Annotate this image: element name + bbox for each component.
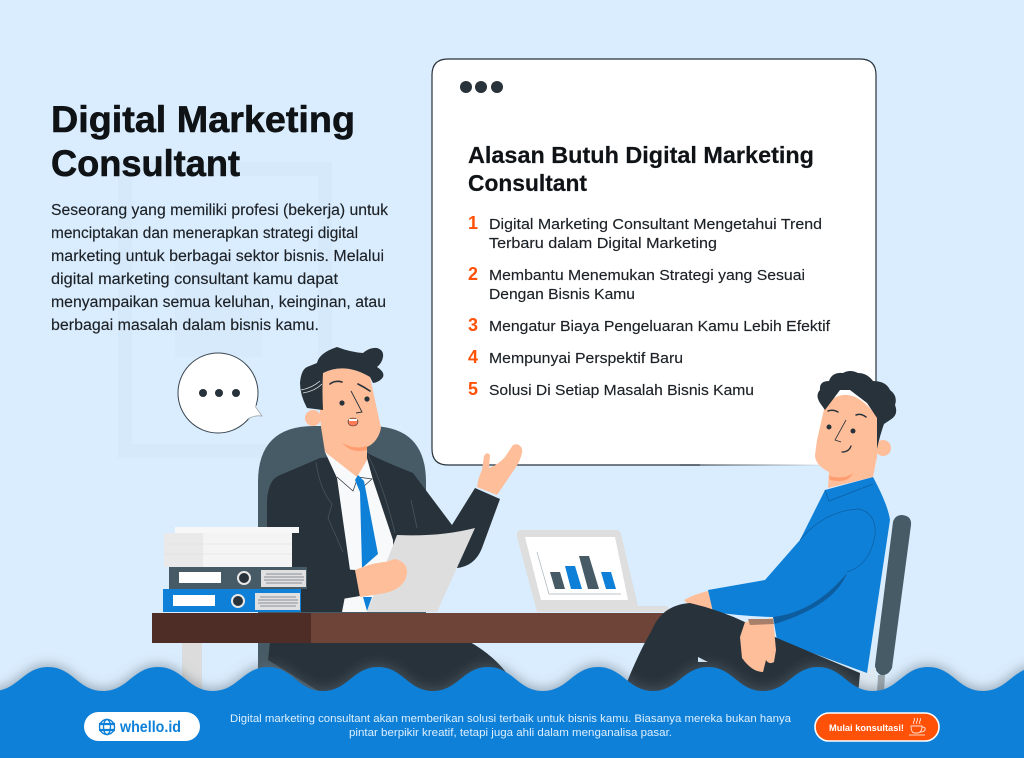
numbered list: Digital Marketing Consultant Mengetahui Trend <box>489 216 822 233</box>
necktie <box>355 475 378 611</box>
illustration: client seated <box>627 371 911 695</box>
lapels <box>316 455 417 552</box>
icon: coffee cup <box>909 718 925 735</box>
stack of files <box>163 527 307 612</box>
icon: speech bubble <box>178 353 262 433</box>
title: Consultant <box>51 143 240 184</box>
sheet of paper <box>367 528 475 612</box>
intro paragraph: menyampaikan semua keluhan, keinginan, atau <box>51 294 386 311</box>
intro paragraph: menciptakan dan menerapkan strategi digital <box>51 225 358 242</box>
icon: globe <box>99 720 115 734</box>
footer text <box>230 713 792 739</box>
intro paragraph: marketing untuk berbagai sektor bisnis. Melalui <box>51 248 384 265</box>
intro paragraph: berbagai masalah dalam bisnis kamu. <box>51 317 319 334</box>
far hand <box>684 591 714 610</box>
footer text: Digital marketing consultant akan memberikan solusi terbaik untuk bisnis kamu. Biasanya mereka bukan hanya <box>230 713 792 725</box>
sweater <box>708 477 890 673</box>
forearm holding paper <box>300 567 360 606</box>
window dots <box>460 81 503 93</box>
intro paragraph: digital marketing consultant kamu dapat <box>51 271 339 288</box>
panel: reasons window <box>432 59 876 466</box>
intro paragraph: Seseorang yang memiliki profesi (bekerja) untuk <box>51 202 388 219</box>
numbered list: Solusi Di Setiap Masalah Bisnis Kamu <box>489 382 754 399</box>
numbered list <box>468 213 831 399</box>
logo pill: whello.id <box>119 719 181 736</box>
collar lines <box>337 477 372 491</box>
face features <box>826 410 866 452</box>
neck and head <box>815 395 877 488</box>
panel heading: Alasan Butuh Digital Marketing <box>468 142 814 168</box>
desk <box>152 613 681 643</box>
illustration: consultant at desk <box>152 347 681 695</box>
neck and head <box>320 368 381 477</box>
hand on paper <box>355 559 407 597</box>
laptop with chart <box>517 530 669 612</box>
panel heading <box>468 142 814 196</box>
intro paragraph <box>51 202 388 334</box>
jacket torso and arm <box>267 453 500 612</box>
chair back <box>875 515 911 675</box>
desk legs <box>182 642 342 692</box>
title: Digital Marketing <box>51 99 355 140</box>
numbered list: Mempunyai Perspektif Baru <box>489 350 683 367</box>
call to action button: Mulai konsultasi! <box>829 723 904 734</box>
trousers <box>627 603 860 695</box>
numbered list: 3 <box>468 315 478 335</box>
numbered list: Membantu Menemukan Strategi yang Sesuai <box>489 267 805 284</box>
jacket lower <box>268 642 520 695</box>
numbered list: 5 <box>468 379 478 399</box>
title <box>51 99 355 184</box>
raised hand <box>477 444 522 495</box>
office chair <box>258 426 426 695</box>
numbered list: 4 <box>468 347 478 367</box>
numbered list: Dengan Bisnis Kamu <box>489 286 635 303</box>
hair <box>300 347 383 410</box>
bar chart <box>550 556 616 589</box>
background watermark <box>125 169 325 451</box>
face features <box>330 381 370 426</box>
wave shadow <box>0 665 1024 756</box>
resting hand <box>740 618 776 672</box>
numbered list: Terbaru dalam Digital Marketing <box>489 235 717 252</box>
shirt <box>325 452 395 612</box>
logo pill <box>84 712 200 741</box>
panel heading: Consultant <box>468 170 587 196</box>
numbered list: 1 <box>468 213 478 233</box>
call to action button <box>815 713 939 741</box>
footer wave band <box>0 667 1024 758</box>
numbered list: 2 <box>468 264 478 284</box>
numbered list: Mengatur Biaya Pengeluaran Kamu Lebih Efektif <box>489 318 831 335</box>
footer text: pintar berpikir kreatif, tetapi juga ahli dalam menganalisa pasar. <box>349 727 672 739</box>
curly hair <box>818 371 896 449</box>
